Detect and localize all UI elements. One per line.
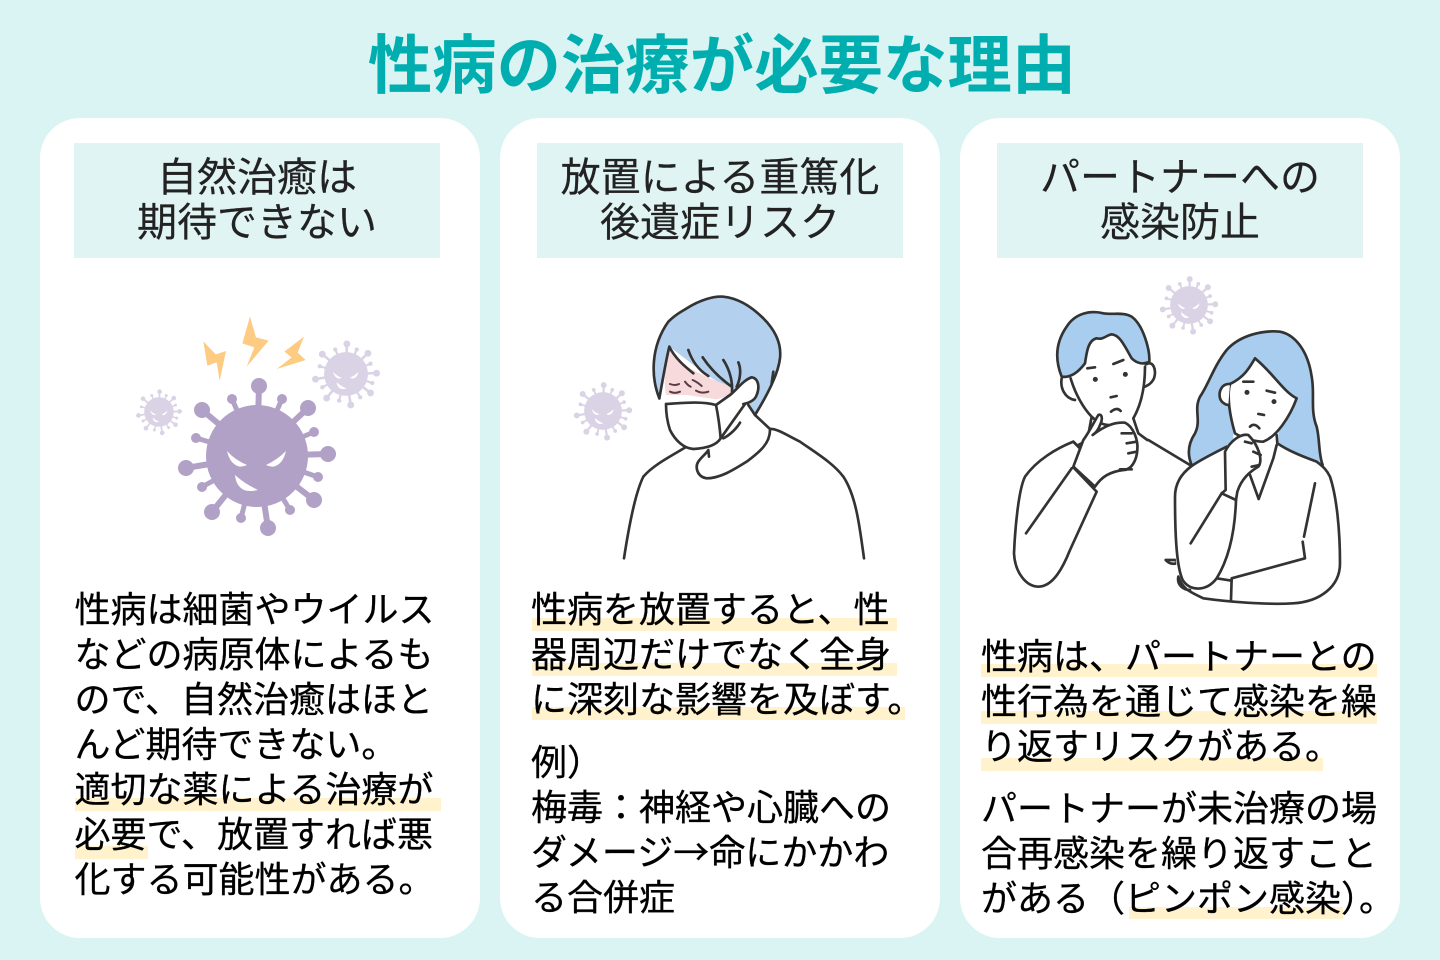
body text: 必要で、放置すれば悪 xyxy=(74,814,433,855)
body text xyxy=(531,589,923,918)
body text: 化する可能性がある。 xyxy=(74,859,435,900)
body text: る合併症 xyxy=(531,877,675,918)
illustration: couple with virus xyxy=(1012,276,1342,606)
body text: 梅毒：神経や心臓への xyxy=(531,787,891,828)
panel heading: パートナーへの xyxy=(1040,156,1320,200)
panel heading: 放置による重篤化 xyxy=(561,156,879,200)
body text: 器周辺だけでなく全身 xyxy=(531,634,891,675)
body text: 適切な薬による治療が xyxy=(74,769,433,810)
panel heading xyxy=(997,143,1363,258)
body text: り返すリスクがある。 xyxy=(981,726,1341,767)
icon: main virus xyxy=(178,378,336,536)
illustration: masked person with virus xyxy=(574,295,866,560)
panel: 自然治癒は期待できない xyxy=(40,118,480,938)
body text: がある（ピンポン感染）。 xyxy=(981,878,1395,919)
icon: small virus right xyxy=(312,340,380,408)
body text xyxy=(74,589,441,900)
person xyxy=(624,297,864,558)
body text: 合再感染を繰り返すこと xyxy=(981,833,1377,874)
body text: 性病は細菌やウイルス xyxy=(74,589,435,630)
body text: ので、自然治癒はほと xyxy=(74,679,433,720)
man xyxy=(1014,312,1192,587)
body text xyxy=(981,636,1395,919)
panel heading: 自然治癒は xyxy=(157,156,357,200)
icon: small virus xyxy=(574,382,632,441)
icon: small virus xyxy=(1160,276,1218,335)
panel heading: 後遺症リスク xyxy=(600,201,840,245)
panel heading: 期待できない xyxy=(137,201,377,245)
body text: パートナーが未治療の場 xyxy=(981,788,1377,829)
body text: に深刻な影響を及ぼす。 xyxy=(531,679,923,720)
body text: 性病を放置すると、性 xyxy=(531,589,890,630)
body text: んど期待できない。 xyxy=(74,724,397,765)
illustration: viruses with lightning xyxy=(136,316,380,536)
title: 性病の治療が必要な理由 xyxy=(368,30,1076,102)
icon: small virus left xyxy=(136,389,182,435)
woman xyxy=(1166,331,1340,604)
panel heading xyxy=(537,143,903,258)
panel heading xyxy=(74,143,440,258)
body text: 性行為を通じて感染を繰 xyxy=(981,681,1377,722)
body text: 例） xyxy=(531,742,603,783)
body text: などの病原体によるも xyxy=(74,634,433,675)
panel: 放置による重篤化後遺症リスク xyxy=(500,118,940,938)
panel heading: 感染防止 xyxy=(1100,201,1260,245)
body text: 性病は、パートナーとの xyxy=(981,636,1377,677)
panel: パートナーへの感染防止 xyxy=(960,118,1400,938)
icon: lightning bolts xyxy=(203,317,306,381)
body text: ダメージ→命にかかわ xyxy=(531,824,889,876)
